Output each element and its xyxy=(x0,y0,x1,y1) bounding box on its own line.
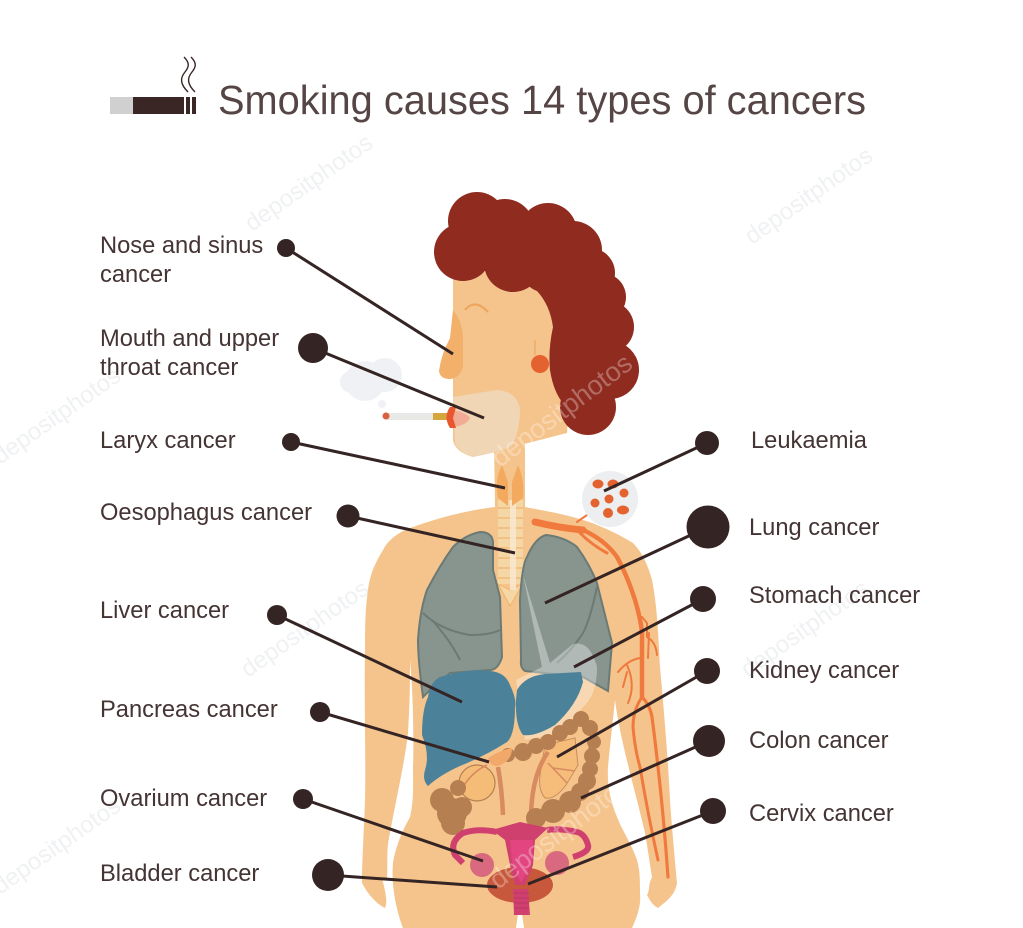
uterus and bladder xyxy=(453,822,588,915)
labels right xyxy=(749,428,920,827)
liver xyxy=(422,670,583,786)
watermarks: depositphotos xyxy=(736,575,874,683)
beard area xyxy=(453,390,520,457)
body watermark: depositphotos xyxy=(486,348,638,473)
labels left: Oesophagus cancer xyxy=(100,500,312,526)
watermarks: depositphotos xyxy=(240,129,378,237)
nose xyxy=(439,310,463,379)
labels left xyxy=(100,233,312,887)
title: Smoking causes 14 types of cancers xyxy=(218,77,866,123)
head xyxy=(453,270,575,457)
labels left: Ovarium cancer xyxy=(100,786,267,812)
stomach overlay xyxy=(516,575,597,740)
labels right: Stomach cancer xyxy=(749,583,920,609)
lungs xyxy=(418,532,612,697)
labels right: Colon cancer xyxy=(749,728,889,754)
leukaemia blood cells xyxy=(582,471,638,527)
larynx and trachea xyxy=(497,465,523,606)
labels left: Liver cancer xyxy=(100,598,229,624)
labels left: Pancreas cancer xyxy=(100,697,278,723)
hair xyxy=(434,192,639,435)
lower watermark: depositphotos xyxy=(484,770,636,895)
labels left: Mouth and upper xyxy=(100,326,279,352)
pointer lines and dots xyxy=(267,239,730,891)
cigarette in mouth xyxy=(382,407,470,428)
labels left: Nose and sinus xyxy=(100,233,263,259)
labels right: Cervix cancer xyxy=(749,801,894,827)
watermarks xyxy=(0,129,878,900)
kidneys xyxy=(459,738,578,815)
eyebrow xyxy=(465,304,488,312)
watermarks: depositphotos xyxy=(740,142,878,250)
labels right: Kidney cancer xyxy=(749,658,899,684)
labels left: Bladder cancer xyxy=(100,861,259,887)
icon: cigarette xyxy=(110,57,196,114)
pancreas xyxy=(488,748,512,766)
watermarks: depositphotos xyxy=(236,575,374,683)
body figure xyxy=(340,192,677,928)
smoke xyxy=(340,358,402,408)
body xyxy=(362,440,677,928)
labels left: Laryx cancer xyxy=(100,428,236,454)
labels left: throat cancer xyxy=(100,355,238,381)
intestines xyxy=(430,711,601,835)
labels left: cancer xyxy=(100,262,171,288)
ear xyxy=(531,340,549,373)
labels right: Lung cancer xyxy=(749,515,879,541)
blood vessels xyxy=(535,515,668,877)
labels right: Leukaemia xyxy=(751,428,868,454)
